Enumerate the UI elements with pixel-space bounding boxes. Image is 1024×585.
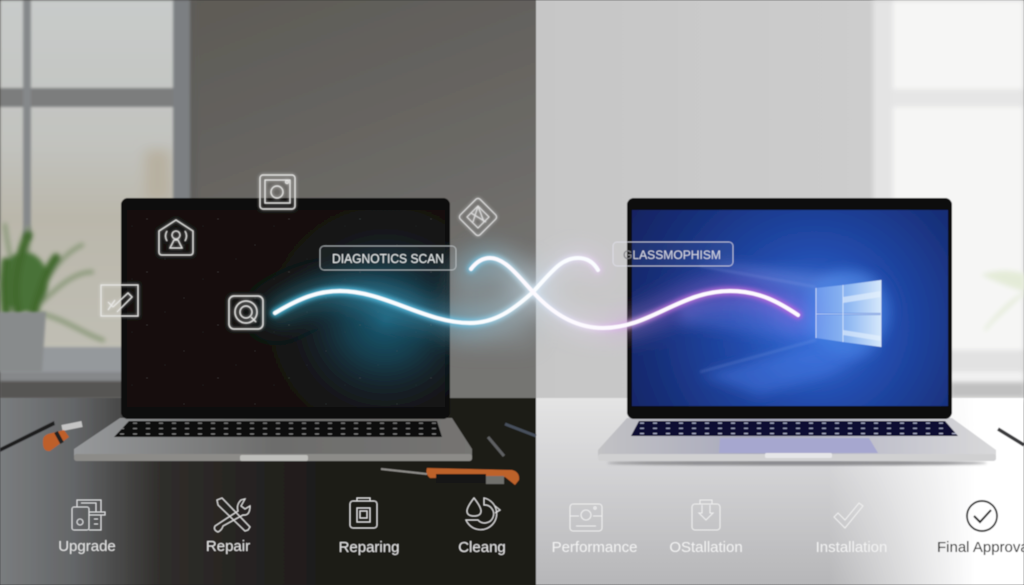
callout: diagnostics scan [320, 246, 456, 270]
step: installation: Installation [816, 539, 887, 556]
trackpad [719, 438, 878, 453]
tool: right desk pen [998, 429, 1024, 445]
icon: water drop and cycle [466, 498, 500, 530]
icon: battery clipboard [350, 498, 377, 528]
icon: camera gauge [570, 504, 602, 531]
step: upgrade: Upgrade [58, 538, 116, 555]
step: repair [206, 498, 250, 555]
latch [765, 453, 832, 458]
step: os installation [669, 500, 743, 556]
step: repair: Repair [206, 538, 250, 555]
step: installation [816, 503, 887, 556]
step: os installation: OStallation [669, 539, 743, 556]
plant: right [985, 272, 1024, 330]
laptop: right screen [627, 198, 952, 419]
pen [0, 421, 55, 452]
laptop: left screen [121, 198, 450, 419]
laptop: left base [74, 418, 472, 461]
icon: download bag [692, 500, 720, 530]
step: reparing [339, 498, 399, 556]
icon: upgrade [72, 500, 105, 530]
callout: glassmorphism [613, 242, 733, 266]
step: cleaning [458, 498, 506, 556]
icon: house with signal [159, 220, 193, 255]
panel: dark desk [0, 398, 536, 585]
panel: after scene background [536, 0, 1024, 400]
icon: crossed tools [214, 498, 250, 532]
keyboard [114, 421, 442, 437]
icon: check circle [967, 501, 997, 531]
callout: diagnostics scan: DIAGNOTICS SCAN [332, 252, 444, 266]
icon: diamond [458, 197, 498, 237]
laptop: right base [598, 418, 996, 466]
bits [488, 437, 504, 456]
panel: light desk [536, 398, 1024, 585]
step: final approval [937, 501, 1024, 556]
centre split wall shading [450, 260, 536, 345]
glowing process curve [275, 258, 798, 328]
window: right [873, 0, 1024, 400]
light rays [680, 262, 881, 395]
screwdriver [381, 469, 427, 474]
plant: left [0, 225, 103, 340]
wrench [62, 424, 82, 428]
tools: left desk [0, 421, 536, 485]
icon: outlined tick [834, 503, 863, 528]
plant pot: left [0, 312, 46, 372]
callout: glassmorphism: GLASSMOPHISM [623, 248, 721, 262]
window: left [0, 0, 198, 398]
step: performance [552, 504, 637, 556]
icon: camera square [260, 175, 295, 209]
panel: before scene background [0, 0, 536, 400]
step: cleaning: Cleang [458, 539, 506, 556]
icon: search [229, 296, 263, 329]
step: reparing: Reparing [339, 539, 399, 556]
latch [240, 455, 308, 461]
windows logo [806, 270, 890, 354]
icon: pencil box [101, 285, 138, 316]
step: upgrade [58, 500, 116, 555]
keyboard [631, 421, 958, 436]
step: performance: Performance [552, 539, 637, 556]
